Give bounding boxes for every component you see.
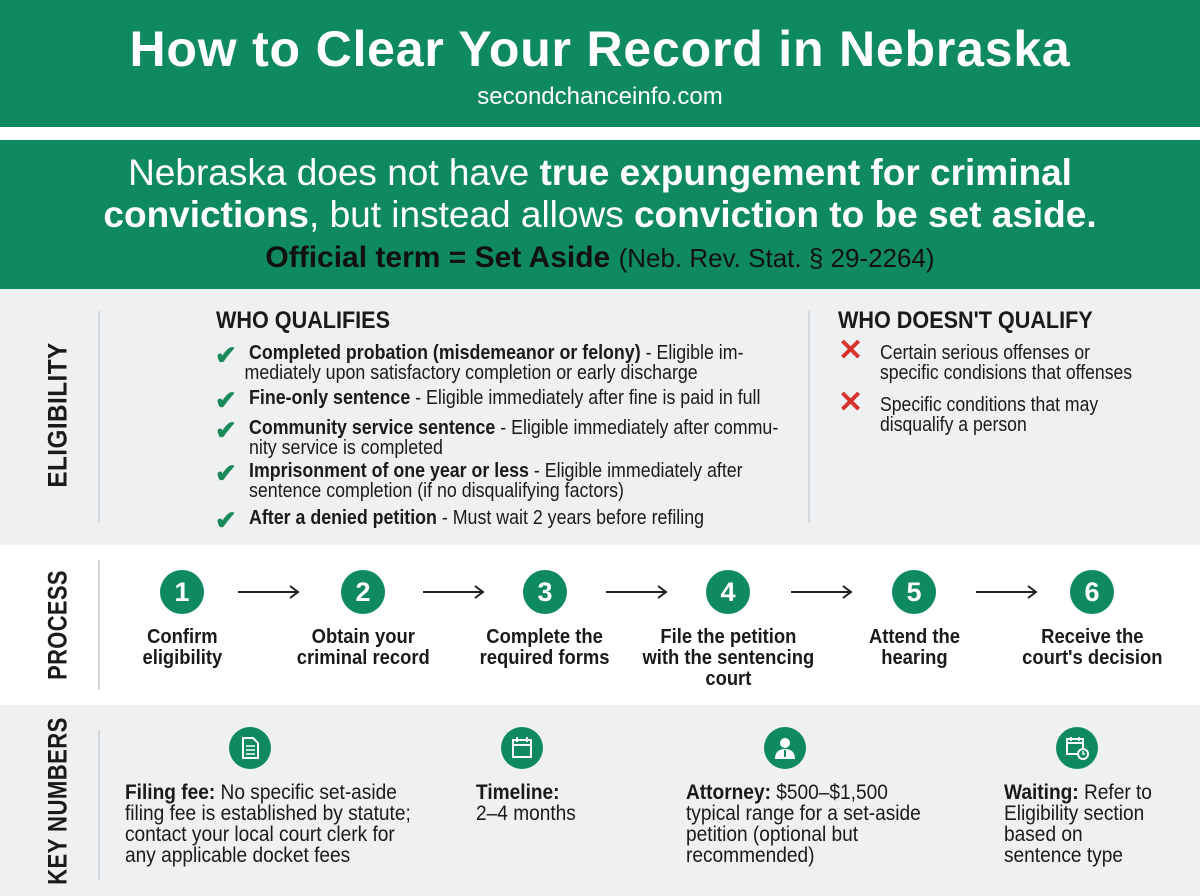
who qualifies heading: WHO QUALIFIES [216,307,390,334]
qualify list: ✔ [215,385,237,415]
steps: hearing [881,647,947,669]
filing fee text: any applicable docket fees [125,844,350,867]
qualify list: ✔ [215,458,237,488]
steps: 4 [720,577,736,607]
filing fee text: filing fee is established by statute; [125,802,411,825]
qualify list: Fine-only sentence - Eligible immediately after fine is paid in full [249,387,760,409]
disqualify list [838,334,1132,436]
disqualify list: ✕ [838,386,863,419]
steps: required forms [480,647,610,669]
waiting text: Waiting: Refer to [1004,781,1152,804]
attorney text: typical range for a set-aside [686,802,921,825]
panel: process [0,545,1200,705]
attorney text: recommended) [686,844,815,867]
intro band [0,140,1200,289]
steps: 3 [537,577,553,607]
disqualify list: Specific conditions that may [880,394,1098,416]
disqualify list: specific condisions that offenses [880,362,1132,384]
timeline text: 2–4 months [476,802,576,825]
timeline text [476,781,576,825]
intro text: Nebraska does not have true expungement for criminal [128,152,1072,193]
key numbers label: KEY NUMBERS [42,717,72,885]
disqualify list: Certain serious offenses or [880,342,1090,364]
icon: document [229,727,271,769]
qualify list: mediately upon satisfactory completion or early discharge [245,362,698,384]
title: How to Clear Your Record in Nebraska [129,21,1071,77]
disqualify list: disqualify a person [880,414,1027,436]
qualify list: Community service sentence - Eligible immediately after commu- [249,417,778,439]
disqualify list: ✕ [838,334,863,367]
steps [142,570,1162,690]
timeline text: Timeline: [476,781,560,804]
steps: Attend the [869,626,959,648]
intro text [103,152,1097,235]
attorney text: petition (optional but [686,823,858,846]
filing fee text: contact your local court clerk for [125,823,395,846]
steps: eligibility [142,647,222,669]
icon: calendar clock [1056,727,1098,769]
filing fee text: Filing fee: No specific set-aside [125,781,397,804]
icon: attorney [764,727,806,769]
filing fee text [125,781,411,867]
qualify list: ✔ [215,505,237,535]
qualify list: ✔ [215,340,237,370]
steps: 6 [1084,577,1100,607]
panel: eligibility [0,289,1200,545]
steps: court [705,668,751,690]
qualify list: After a denied petition - Must wait 2 years before refiling [249,507,704,529]
steps: court's decision [1022,647,1162,669]
steps: Complete the [487,626,603,648]
steps: 2 [355,577,371,607]
steps: 5 [906,577,922,607]
qualify list: Imprisonment of one year or less - Eligible immediately after [249,460,743,482]
steps: File the petition [660,626,796,648]
attorney text: Attorney: $500–$1,500 [686,781,888,804]
header [0,0,1200,127]
qualify list: sentence completion (if no disqualifying factors) [249,480,624,502]
qualify list: nity service is completed [249,437,443,459]
process label: PROCESS [42,570,72,680]
steps: Confirm [147,626,217,648]
steps: Obtain your [311,626,415,648]
attorney text [686,781,921,867]
waiting text: sentence type [1004,844,1123,867]
panel: key numbers [0,705,1200,896]
icon: calendar [501,727,543,769]
waiting text: based on [1004,823,1083,846]
steps: Receive the [1041,626,1143,648]
intro text: convictions, but instead allows conviction to be set aside. [103,194,1097,235]
qualify list [215,340,778,535]
qualify list: ✔ [215,415,237,445]
waiting text: Eligibility section [1004,802,1144,825]
waiting text [1004,781,1152,867]
steps: with the sentencing [642,647,814,669]
steps: 1 [174,577,190,607]
official term: Official term = Set Aside (Neb. Rev. Stat. § 29-2264) [265,241,935,274]
who doesn't qualify heading: WHO DOESN'T QUALIFY [838,307,1093,334]
eligibility label: ELIGIBILITY [42,342,72,488]
website: secondchanceinfo.com [477,83,723,110]
qualify list: Completed probation (misdemeanor or felony) - Eligible im- [249,342,744,364]
steps: criminal record [297,647,429,669]
